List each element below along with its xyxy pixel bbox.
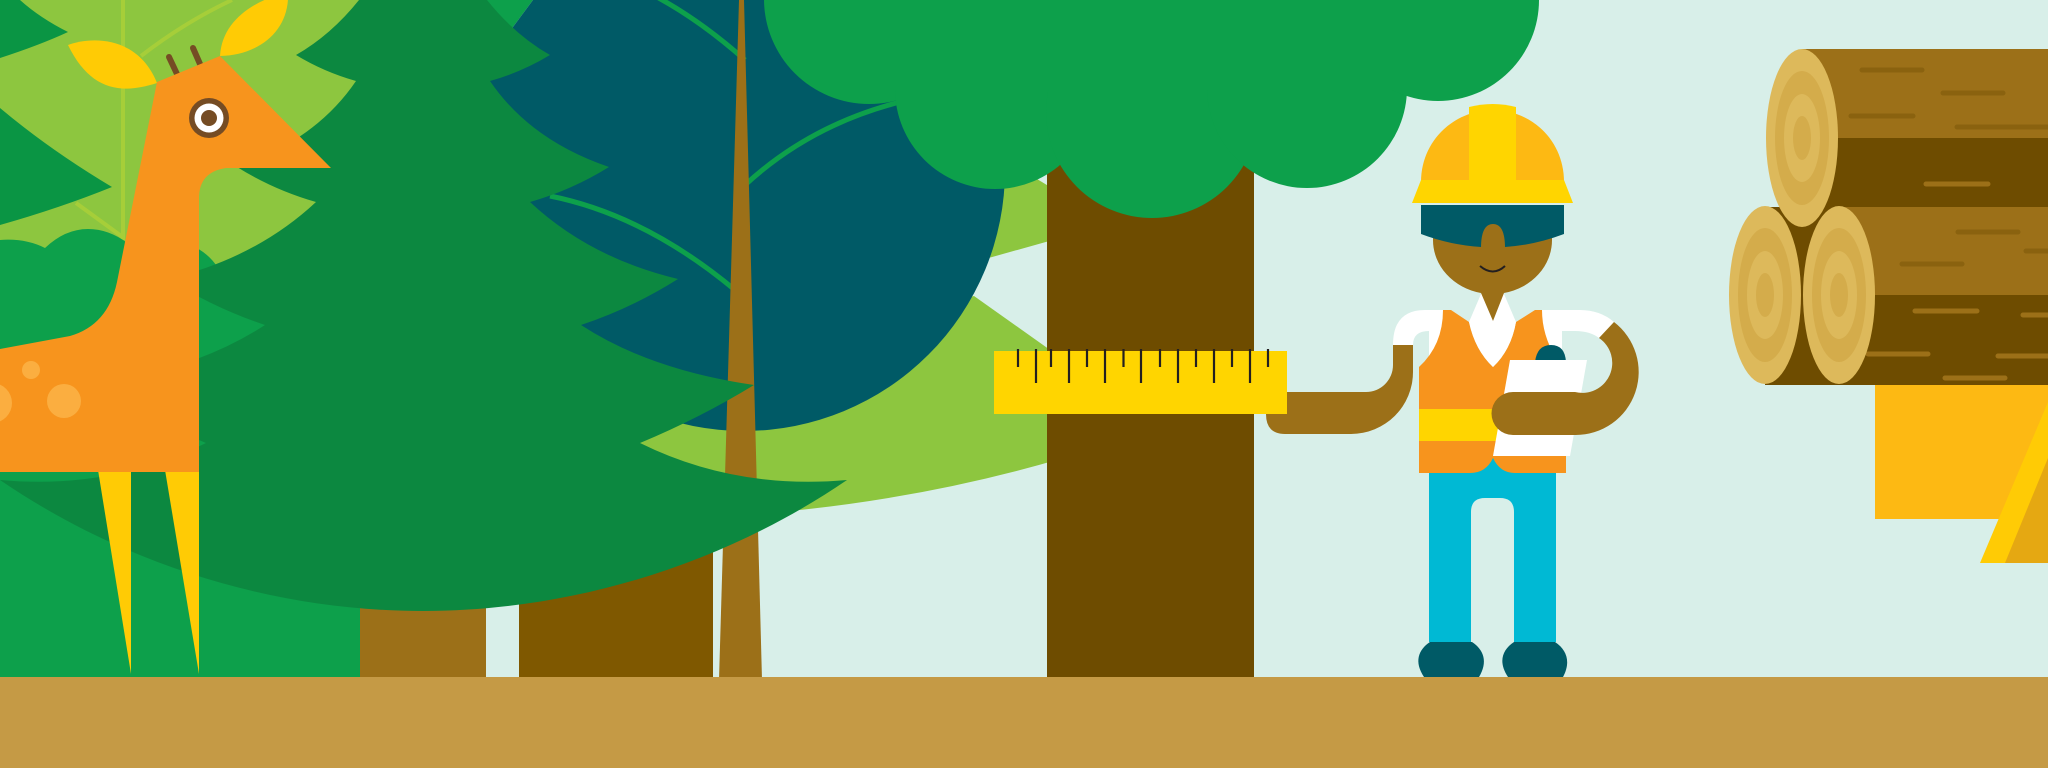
worker vest xyxy=(1419,310,1566,473)
worker clipboard xyxy=(1493,360,1587,456)
deer ears xyxy=(68,0,288,89)
deer antlers xyxy=(169,48,200,74)
top log body xyxy=(1802,49,2048,208)
small green canopy corner xyxy=(470,0,533,50)
worker left arm xyxy=(1266,345,1413,434)
worker xyxy=(1266,104,1639,677)
log end left xyxy=(1729,206,1801,384)
thin tapered trunk xyxy=(719,0,762,680)
yellow machine arm xyxy=(1980,402,2048,563)
worker shoes xyxy=(1418,642,1567,677)
worker clip xyxy=(1535,345,1566,362)
worker collar xyxy=(1469,294,1516,367)
worker right arm xyxy=(1492,322,1639,435)
deer eye xyxy=(189,98,229,138)
measuring ruler xyxy=(994,349,1287,414)
teal round tree xyxy=(480,0,1005,431)
dark brown trunk xyxy=(519,500,713,680)
deer legs xyxy=(98,470,199,674)
big measured trunk xyxy=(1047,130,1254,680)
deer xyxy=(0,0,331,674)
big green canopy xyxy=(764,0,1539,218)
deer body xyxy=(0,56,331,472)
log stack xyxy=(1729,49,2048,385)
light green leaf tree right part xyxy=(600,150,1060,511)
main pine tree xyxy=(0,0,847,611)
log end top xyxy=(1766,49,1838,227)
log end right xyxy=(1803,206,1875,384)
medium brown trunk xyxy=(360,560,486,680)
dark green left pine tiers xyxy=(0,0,112,225)
light green leaf tree left part xyxy=(0,0,430,320)
worker face xyxy=(1433,205,1552,321)
wood grain dashes xyxy=(1851,70,2048,378)
bottom log bodies xyxy=(1765,207,2048,385)
worker smile xyxy=(1480,266,1505,272)
worker white shirt sleeves xyxy=(1393,310,1614,360)
ground xyxy=(0,677,2048,768)
yellow machine box xyxy=(1875,385,2048,519)
worker trousers xyxy=(1429,440,1556,642)
worker vest reflective band xyxy=(1419,409,1499,441)
worker nose xyxy=(1481,224,1505,248)
left green bush and lower tree block xyxy=(0,229,360,680)
worker hard hat xyxy=(1412,104,1573,203)
worker safety glasses xyxy=(1421,205,1564,247)
deer spots xyxy=(0,361,81,423)
